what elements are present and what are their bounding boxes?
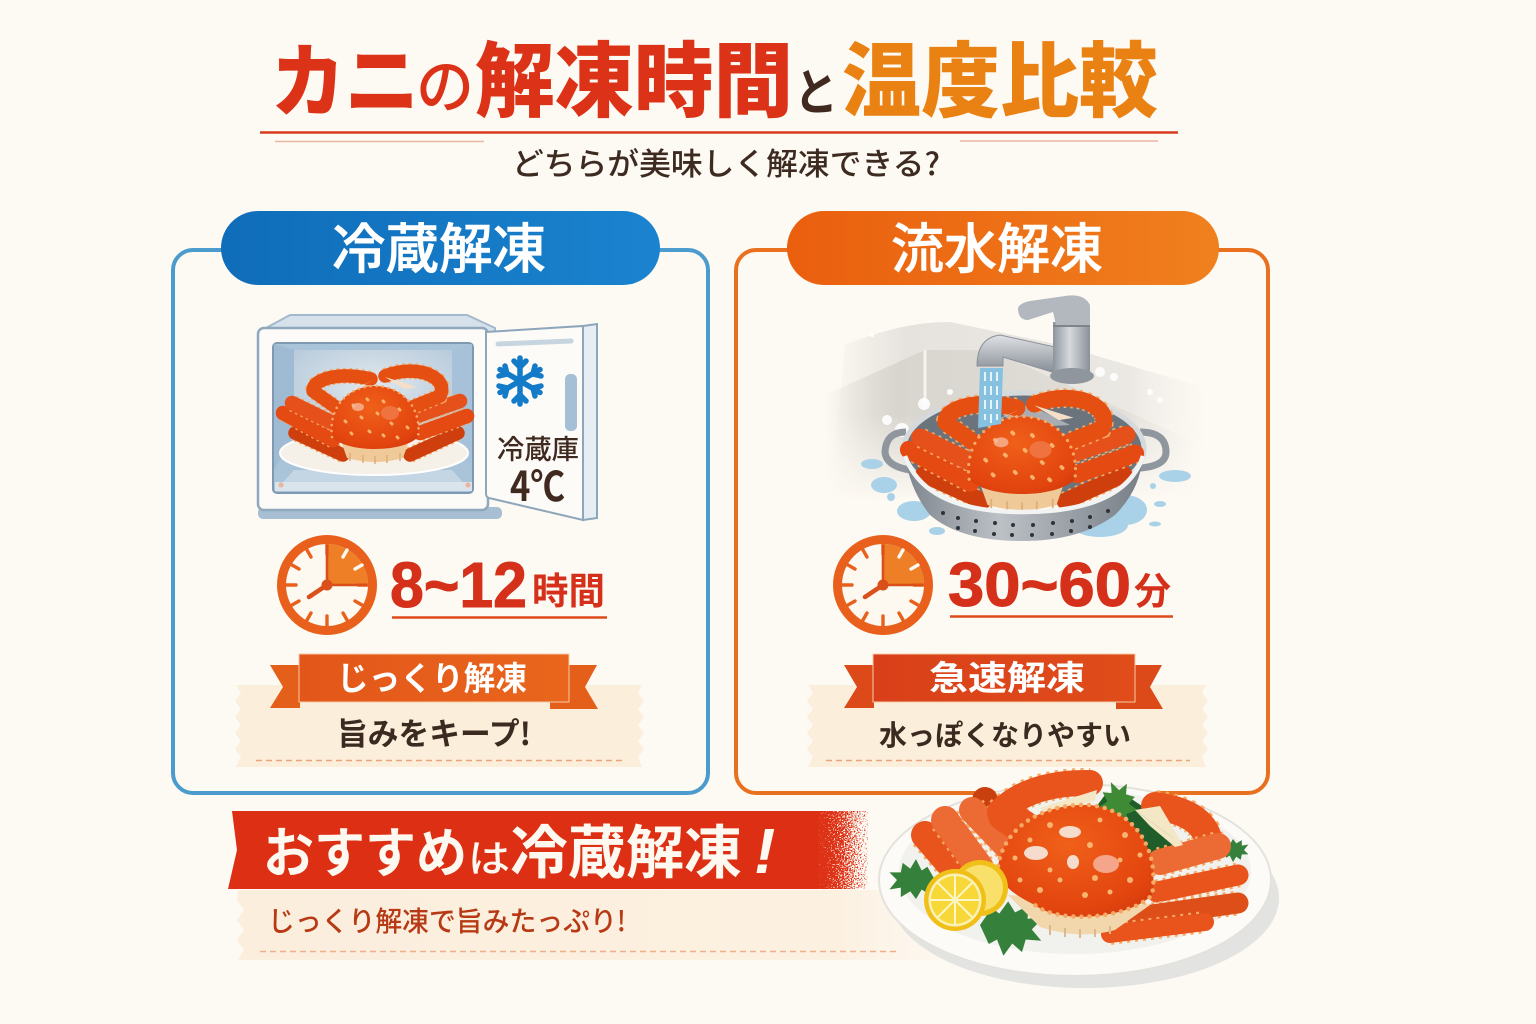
thaw time 8~12 hours <box>390 549 607 621</box>
panel heading pill: 流水解凍 <box>891 205 1103 284</box>
title <box>271 15 1158 134</box>
panel heading pill <box>787 205 1219 285</box>
shell speckles <box>1012 818 1142 898</box>
recommendation banner: おすすめ <box>263 809 467 888</box>
recommendation banner <box>228 806 868 890</box>
recommendation banner: ! <box>754 815 775 887</box>
subtitle: どちらが美味しく解凍できる? <box>512 139 940 184</box>
panel heading pill <box>221 205 660 285</box>
illustration: crab in colander under faucet <box>825 295 1205 541</box>
recommendation cream panel <box>237 890 940 960</box>
panel frame <box>173 250 708 793</box>
thaw time 8~12 hours: 時間 <box>532 561 605 615</box>
paper note <box>807 685 1208 767</box>
garnish leaves <box>889 781 1248 959</box>
crab underside <box>1008 895 1150 934</box>
title: カニ <box>271 18 419 134</box>
thaw time 30~60 minutes: 分 <box>1134 561 1171 615</box>
colander front <box>905 456 1143 541</box>
illustration: open refrigerator with crab <box>258 315 597 520</box>
icon: clock <box>833 535 933 635</box>
ribbon: rapid thaw: 急速解凍 <box>929 651 1085 700</box>
fridge temperature label: 4℃ <box>510 453 565 513</box>
thaw time 8~12 hours: 8~12 <box>390 549 527 621</box>
water stream <box>978 368 1003 428</box>
note text: 水っぽくなりやすい <box>879 714 1131 754</box>
faucet <box>977 295 1094 384</box>
fridge temperature label: 冷蔵庫 <box>497 428 579 467</box>
fridge temperature label <box>497 428 579 513</box>
recommendation subtext: じっくり解凍で旨みたっぷり! <box>268 900 626 940</box>
ribbon: slow thaw <box>270 652 598 709</box>
legs <box>925 783 1238 934</box>
title: の <box>416 39 474 126</box>
panel: refrigerator thawing <box>173 205 708 793</box>
paper note <box>235 685 644 767</box>
colander back <box>885 393 1166 505</box>
panel heading pill: 冷蔵解凍 <box>332 205 546 284</box>
claw pincers <box>1040 790 1183 847</box>
title: 温度比較 <box>842 15 1158 134</box>
note text: 旨みをキープ! <box>337 709 531 754</box>
title rule <box>260 132 1178 142</box>
thaw time 30~60 minutes: 30~60 <box>948 551 1131 620</box>
title: と <box>794 53 838 125</box>
icon: snowflake <box>499 358 541 404</box>
water splashes <box>861 459 1191 537</box>
recommendation banner: は <box>468 828 510 883</box>
ribbon: rapid thaw <box>844 651 1163 709</box>
lemon slices <box>924 860 1008 931</box>
ribbon: slow thaw: じっくり解凍 <box>337 652 527 700</box>
icon: clock <box>277 535 377 635</box>
recommendation banner: 冷蔵解凍 <box>510 806 742 890</box>
crab shell <box>998 805 1153 917</box>
panel frame <box>736 250 1268 793</box>
title: 解凍時間 <box>475 15 793 134</box>
panel: running water thawing <box>736 205 1268 793</box>
illustration: plated crab with lemon <box>879 781 1279 988</box>
